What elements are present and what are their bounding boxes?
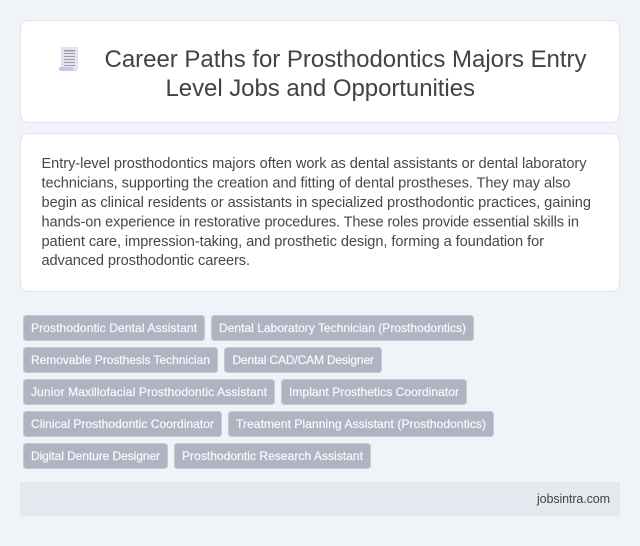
tag: Prosthodontic Research Assistant: Prosthodontic Research Assistant [182, 449, 364, 463]
tag: Dental CAD/CAM Designer [224, 348, 382, 372]
title [104, 46, 586, 102]
footer text: site name: jobsintra.com [536, 492, 610, 506]
title: Level Jobs and Opportunities [166, 75, 475, 102]
tag: Implant Prosthetics Coordinator: Implant Prosthetics Coordinator [289, 385, 459, 399]
panel: job tags [24, 316, 494, 468]
tag: Clinical Prosthodontic Coordinator [24, 412, 222, 436]
tag: Junior Maxillofacial Prosthodontic Assistant [24, 380, 274, 404]
tag: Removable Prosthesis Technician: Removable Prosthesis Technician [31, 353, 210, 367]
text block: description: technicians, supporting the creation and fitting of dental prostheses. They may also [42, 176, 570, 192]
tag: Dental Laboratory Technician [212, 316, 474, 340]
tag: Digital Denture Designer: Digital Denture Designer [31, 449, 160, 463]
tag: Dental Laboratory Technician: Dental Laboratory Technician (Prosthodontics) [219, 321, 466, 335]
icon: document scroll [59, 47, 78, 71]
text block: description: begin as clinical residents or assistants in specialized prosthodontic practices, gaining [42, 195, 591, 211]
text block: description: Entry-level prosthodontics majors often work as dental assistants or dental laboratory [42, 156, 587, 172]
text block: description: hands-on experience in restorative procedures. These roles provide essential skills in [42, 214, 579, 230]
tag: Prosthodontic Research Assistant [174, 444, 370, 468]
tag: Treatment Planning Assistant: Treatment Planning Assistant (Prosthodontics) [236, 417, 486, 431]
footer [20, 482, 620, 516]
panel: header [20, 20, 620, 122]
tag: Prosthodontic Dental Assistant: Prosthodontic Dental Assistant [31, 321, 198, 335]
tag: Dental CAD/CAM Designer: Dental CAD/CAM Designer [232, 353, 374, 367]
tag: Implant Prosthetics Coordinator [282, 380, 466, 404]
text block: description [42, 156, 591, 269]
tag: Treatment Planning Assistant [228, 412, 494, 436]
title: Career Paths for Prosthodontics Majors Entry [104, 46, 586, 73]
tag: Digital Denture Designer [24, 444, 168, 468]
tag: Clinical Prosthodontic Coordinator: Clinical Prosthodontic Coordinator [31, 417, 214, 431]
tag: Removable Prosthesis Technician [24, 348, 218, 372]
tag: Prosthodontic Dental Assistant [24, 316, 204, 340]
text block: description: patient care, impression-taking, and prosthetic design, forming a foundation for [42, 234, 544, 250]
text block: description: advanced prosthodontic careers. [42, 253, 250, 269]
panel: description [20, 134, 620, 292]
tag: Junior Maxillofacial Prosthodontic Assistant: Junior Maxillofacial Prosthodontic Assistant [31, 385, 268, 399]
